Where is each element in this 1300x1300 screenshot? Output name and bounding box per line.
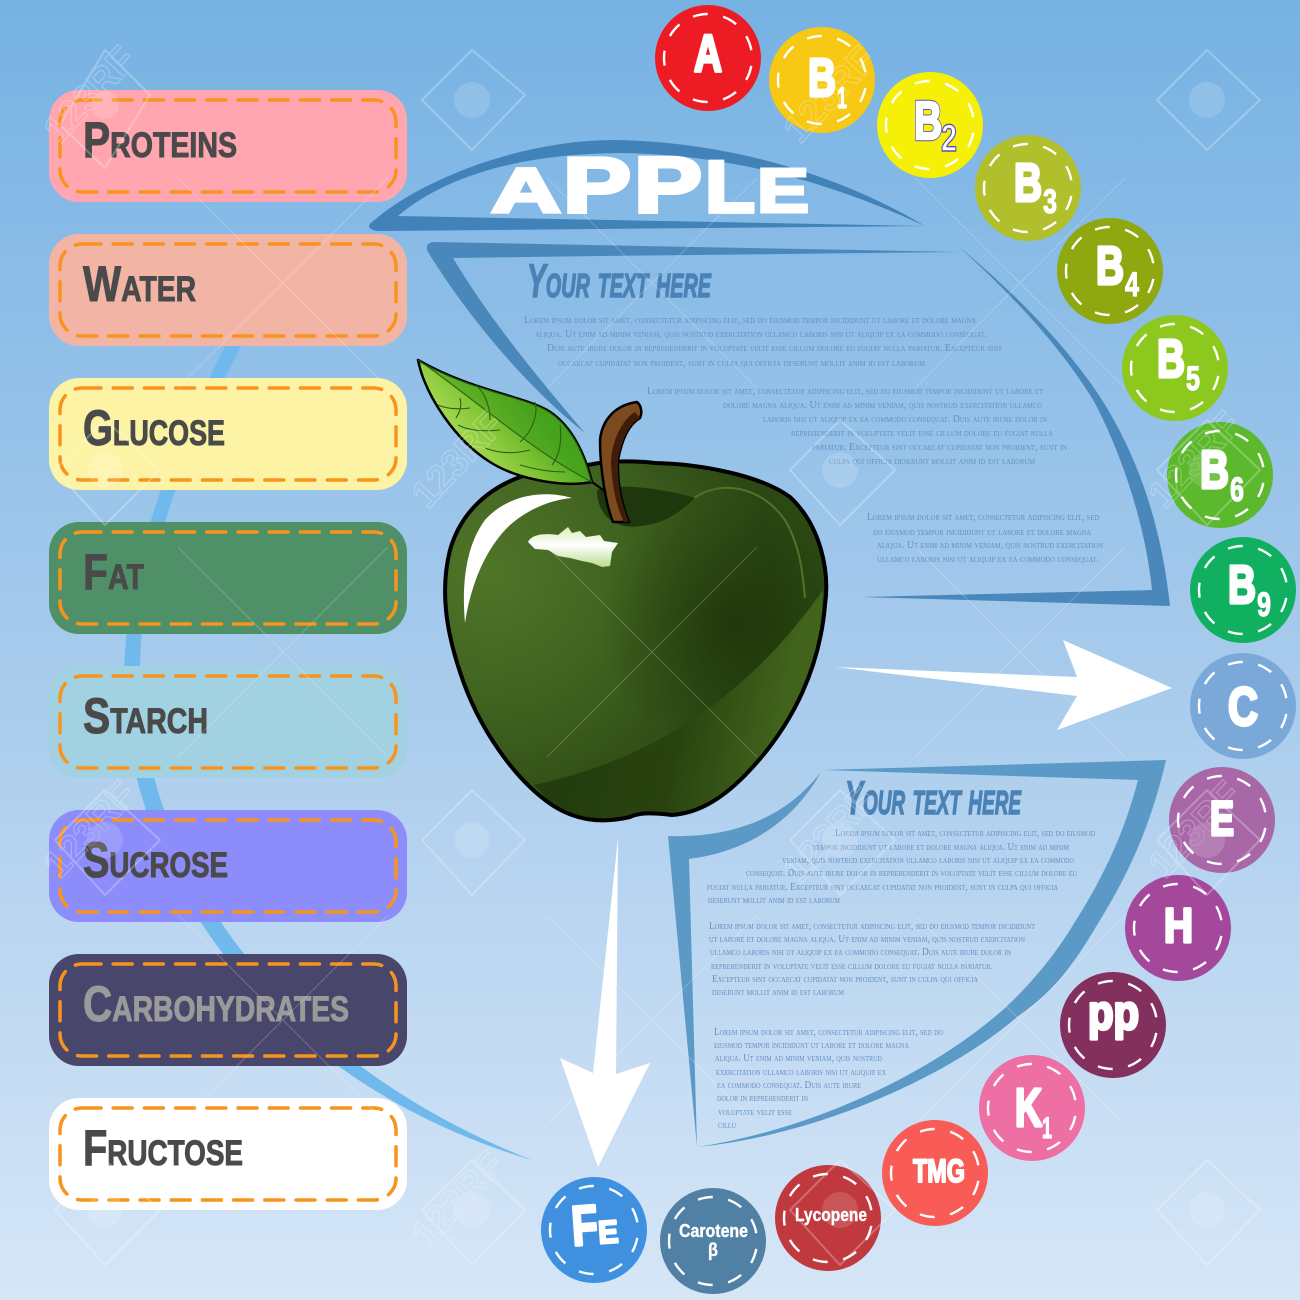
pale gloss patch xyxy=(528,527,618,567)
icon: green apple xyxy=(418,360,826,820)
lower text paragraph 1: Lorem ipsum dolor sit amet, consectetur adipiscing elit, sed do eiusmod xyxy=(835,828,1095,839)
apple dimple xyxy=(597,487,695,527)
icon: vitamin C xyxy=(1190,653,1296,759)
panel: sucrose xyxy=(49,810,407,922)
panel: fat: Fat xyxy=(83,544,144,600)
lower text paragraph 2: ullamco laboris nisi ut aliquip ex ea commodo consequat. Duis aute irure dolor in xyxy=(710,947,1011,958)
panel: carbohydrates: Carbohydrates xyxy=(83,976,349,1032)
watermark overlay: 123RF xyxy=(404,404,512,516)
apple rim highlight xyxy=(694,488,805,598)
arrow: right to vitamin C xyxy=(835,640,1172,730)
icon: vitamin B9: B xyxy=(1228,555,1256,615)
panel: water: Water xyxy=(83,256,196,312)
upper text paragraph 1: Duis aute irure dolor in reprehenderit in voluptate velit esse cillum dolore eu fugiat nulla pariatur. Excepteur sint xyxy=(547,343,1003,354)
title: E xyxy=(757,156,809,225)
title: A xyxy=(491,155,561,226)
icon: vitamin B4: 4 xyxy=(1125,266,1139,304)
lower text paragraph 3: ea commodo consequat. Duis aute irure xyxy=(717,1080,861,1091)
upper text paragraph 2: laboris nisi ut aliquip ex ea commodo consequat. Duis aute irure dolor in xyxy=(763,414,1047,425)
title: P xyxy=(563,142,631,229)
icon: vitamin B9 xyxy=(1190,537,1296,643)
icon: vitamin B5 xyxy=(1122,315,1228,421)
lower text paragraph 1: deserunt mollit anim id est laborum xyxy=(708,895,841,906)
icon: vitamin B1 xyxy=(769,27,875,133)
stem xyxy=(600,402,641,522)
icon: vitamin B3: 3 xyxy=(1043,183,1057,221)
icon: vitamin E: E xyxy=(1210,793,1234,846)
panel: lower text frame xyxy=(668,760,1166,1147)
icon: vitamin B1: B xyxy=(808,48,836,108)
lower text paragraph 3: aliqua. Ut enim ad minim veniam, quis nostrud xyxy=(715,1053,882,1064)
watermark overlay: 123RF xyxy=(1141,774,1249,886)
apple dark side shade xyxy=(445,461,826,820)
lower text paragraph 3 xyxy=(714,1027,943,1131)
lower text paragraph 2 xyxy=(709,921,1036,998)
apple body xyxy=(445,461,826,820)
icon: vitamin E xyxy=(1169,767,1275,873)
lower text paragraph 1: consequat. Duis aute irure dolor in reprehenderit in voluptate velit esse cillum dolore eu xyxy=(746,868,1077,879)
icon: vitamin C: C xyxy=(1228,677,1258,737)
icon: vitamin B5: B xyxy=(1157,329,1185,389)
watermark overlay: 123RF xyxy=(36,39,144,151)
icon: vitamin B1: 1 xyxy=(837,82,847,115)
upper text paragraph 3: aliqua. Ut enim ad minim veniam, quis nostrud exercitation xyxy=(877,540,1103,551)
icon: lycopene: Lycopene xyxy=(795,1205,867,1225)
upper frame right curve xyxy=(862,246,1170,606)
icon: vitamin H: H xyxy=(1164,900,1193,953)
upper text paragraph 3 xyxy=(867,512,1103,565)
watermark overlay: 123RF xyxy=(776,779,884,891)
upper text paragraph 1: occaecat cupidatat non proident, sunt in culpa qui officia deserunt mollit anim id est laborum xyxy=(558,358,926,369)
panel: sucrose: Sucrose xyxy=(83,832,228,888)
icon: vitamin A xyxy=(655,5,761,111)
upper text paragraph 1: aliqua. Ut enim ad minim veniam, quis nostrud exercitation ullamco laboris nisi ut aliquip ex ea commodo consequat. xyxy=(535,329,987,340)
lower text paragraph 2: ut labore et dolore magna aliqua. Ut enim ad minim veniam, quis nostrud exercitation xyxy=(709,934,1025,945)
leaf xyxy=(418,360,606,492)
lower text paragraph 2: Lorem ipsum dolor sit amet, consectetur adipiscing elit, sed do eiusmod tempor incididunt xyxy=(709,921,1036,932)
apple outline xyxy=(445,461,826,820)
panel: starch: Starch xyxy=(83,688,208,744)
panel: fat xyxy=(49,522,407,634)
white gloss xyxy=(464,494,572,623)
upper text paragraph 1: Lorem ipsum dolor sit amet, consectetur adipiscing elit, sed do eiusmod tempor incididunt ut labore et dolore magna xyxy=(524,315,976,326)
panel: fructose: Fructose xyxy=(83,1120,243,1176)
upper text paragraph 2: reprehenderit in voluptate velit esse cillum dolore eu fugiat nulla xyxy=(791,428,1053,439)
panel: starch xyxy=(49,666,407,778)
icon: vitamin B9: 9 xyxy=(1257,586,1271,624)
lower frame shape xyxy=(668,760,1166,1147)
watermark overlay: 123RF xyxy=(404,1144,512,1256)
icon: vitamin K1: K xyxy=(1015,1078,1042,1138)
icon: vitamin B6 xyxy=(1167,422,1273,528)
icon: vitamin B2: 2 xyxy=(941,118,957,160)
icon: iron Fe: E xyxy=(597,1213,619,1251)
icon: TMG: TMG xyxy=(913,1153,965,1189)
upper text paragraph 2: Lorem ipsum dolor sit amet, consectetur adipiscing elit, sed do eiusmod tempor incididunt ut labore et xyxy=(647,386,1044,397)
upper text paragraph 3: do eiusmod tempor incididunt ut labore et dolore magna xyxy=(873,527,1091,538)
panel: glucose: Glucose xyxy=(83,400,225,456)
title arc xyxy=(369,140,925,231)
upper text paragraph 1 xyxy=(524,315,1003,369)
lower text paragraph 2: reprehenderit in voluptate velit esse cillum dolore eu fugiat nulla pariatur. xyxy=(711,961,993,972)
icon: vitamin K1: 1 xyxy=(1042,1112,1052,1145)
lower text paragraph 2: Excepteur sint occaecat cupidatat non proident, sunt in culpa qui officia xyxy=(712,974,978,985)
watermark overlay: 123RF xyxy=(776,39,884,151)
title xyxy=(491,141,809,230)
lower text paragraph 3: voluptate velit esse xyxy=(718,1107,792,1118)
panel: upper text frame xyxy=(427,242,1170,606)
icon: vitamin B3 xyxy=(975,135,1081,241)
icon: iron Fe xyxy=(541,1177,647,1283)
icon: carotene beta xyxy=(660,1188,766,1294)
icon: vitamin A: A xyxy=(694,25,722,83)
icon: vitamin B5: 5 xyxy=(1186,360,1200,398)
panel: carbohydrates xyxy=(49,954,407,1066)
lower text paragraph 1: tempor incididunt ut labore et dolore magna aliqua. Ut enim ad minim xyxy=(813,842,1070,853)
watermark overlay: 123RF xyxy=(36,774,144,886)
panel: water xyxy=(49,234,407,346)
icon: vitamin B3: B xyxy=(1014,153,1042,213)
lower text paragraph 3: eiusmod tempor incididunt ut labore et dolore magna xyxy=(714,1040,909,1051)
icon: vitamin PP xyxy=(1060,972,1166,1078)
upper text paragraph 2: pariatur. Excepteur sint occaecat cupidatat non proident, sunt in xyxy=(812,442,1067,453)
panel: proteins xyxy=(49,90,407,202)
upper text paragraph 2: dolore magna aliqua. Ut enim ad minim veniam, quis nostrud exercitation ullamco xyxy=(723,400,1042,411)
upper text paragraph 3: ullamco laboris nisi ut aliquip ex ea commodo consequat. xyxy=(877,554,1099,565)
lower text paragraph 3: dolor in reprehenderit in xyxy=(717,1093,808,1104)
icon: lycopene xyxy=(775,1165,881,1271)
panel: glucose xyxy=(49,378,407,490)
icon: vitamin B6: B xyxy=(1200,440,1229,500)
lower text paragraph 3: cillu xyxy=(718,1120,736,1131)
upper text paragraph 2: culpa qui officia deserunt mollit anim id est laborum xyxy=(829,456,1036,467)
icon: vitamin K1 xyxy=(979,1055,1085,1161)
lower heading: Your text here xyxy=(845,771,1022,824)
icon: vitamin B2: B xyxy=(914,91,942,151)
panel: proteins: Proteins xyxy=(83,112,237,168)
title: L xyxy=(705,146,755,228)
icon: vitamin B2 xyxy=(877,72,983,178)
icon: vitamin H xyxy=(1125,875,1231,981)
lower text paragraph 1 xyxy=(707,828,1095,906)
upper heading: Your text here xyxy=(527,254,712,307)
upper text paragraph 3: Lorem ipsum dolor sit amet, consectetur adipiscing elit, sed xyxy=(867,512,1099,523)
icon: vitamin B4 xyxy=(1057,218,1163,324)
lower text paragraph 3: Lorem ipsum dolor sit amet, consectetur adipiscing elit, sed do xyxy=(714,1027,943,1038)
icon: vitamin PP: pp xyxy=(1088,987,1139,1040)
light blue arc behind labels xyxy=(124,345,532,1160)
lower text paragraph 3: exercitation ullamco laboris nisi ut aliquip ex xyxy=(716,1067,886,1078)
icon: TMG xyxy=(882,1120,988,1226)
icon: vitamin B6: 6 xyxy=(1230,471,1244,509)
title: P xyxy=(634,141,702,230)
lower text paragraph 1: fugiat nulla pariatur. Excepteur sint occaecat cupidatat non proident, sunt in culpa qui officia xyxy=(707,882,1058,893)
lower text paragraph 1: veniam, quis nostrud exercitation ullamco laboris nisi ut aliquip ex ea commodo xyxy=(782,855,1074,866)
upper text paragraph 2 xyxy=(647,386,1067,467)
lower text paragraph 2: deserunt mollit anim id est laborum xyxy=(712,987,845,998)
arrow: down to Fe xyxy=(560,838,650,1167)
icon: vitamin B4: B xyxy=(1096,236,1124,296)
icon: carotene beta: Carotene xyxy=(679,1221,748,1241)
panel: fructose xyxy=(49,1098,407,1210)
upper frame shape xyxy=(427,242,960,433)
icon: vitamin B2: B xyxy=(914,91,942,151)
apple lower shade xyxy=(534,590,823,820)
watermark overlay: 123RF xyxy=(1141,404,1249,516)
icon: carotene beta: β xyxy=(708,1240,718,1260)
icon: iron Fe: F xyxy=(569,1193,600,1257)
